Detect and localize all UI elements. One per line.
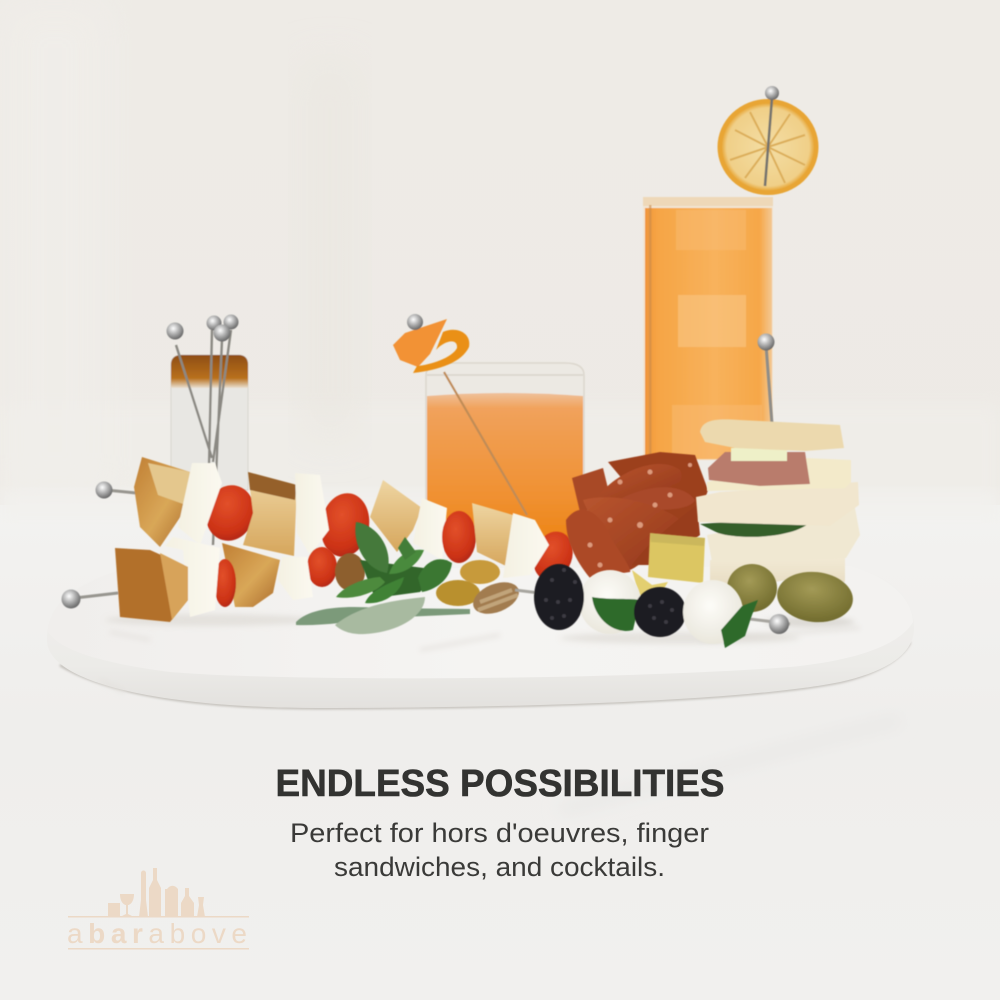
- short cocktail glass: [426, 363, 584, 545]
- olives: [727, 564, 855, 626]
- cheese cube: [632, 533, 705, 598]
- subheading text: [290, 818, 709, 882]
- food shadows on board: [105, 614, 855, 644]
- marble serving board: [47, 566, 914, 708]
- sage leaves: [296, 597, 470, 634]
- logo: A Bar Above: abarabove: [67, 918, 247, 949]
- dried lemon garnish with pin: [718, 86, 818, 195]
- lower skewer: pin, bread, mozzarella and tomato: [62, 537, 365, 622]
- headline: ENDLESS POSSIBILITIES: [276, 763, 724, 805]
- salami rosette: [566, 452, 708, 578]
- basil sprig: [336, 522, 452, 603]
- tall cocktail glass: [643, 197, 773, 460]
- mozzarella and blackberry skewer with pin: [515, 564, 790, 648]
- finger sandwich stack: [696, 419, 860, 592]
- shot glass with amber rim holding pins: [166, 314, 248, 545]
- pin resting against tall glass: [758, 334, 774, 424]
- subheading text: Perfect for hors d'oeuvres, finger: [290, 818, 709, 848]
- upper skewer: pin, bread, mozzarella and tomato: [96, 457, 579, 586]
- orange peel garnish with pin: [393, 314, 469, 373]
- spiced nuts: [436, 560, 523, 620]
- logo: A Bar Above: [67, 868, 249, 950]
- subheading text: sandwiches, and cocktails.: [334, 852, 665, 882]
